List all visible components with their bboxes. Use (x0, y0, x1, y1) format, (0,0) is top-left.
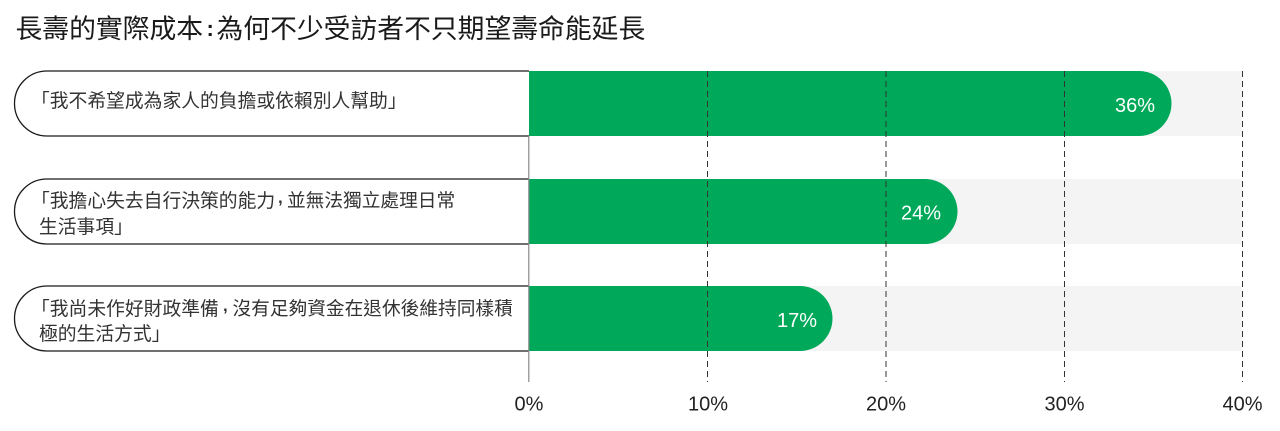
row 2 (15, 179, 1242, 244)
label pill 2: 「我擔心失去自行決策的能力 (31, 190, 275, 211)
label pill 1 (15, 71, 529, 136)
label pill 3: 極的生活方式」 (39, 323, 170, 344)
track 2 (529, 179, 1242, 244)
bar value labels: 17% (777, 310, 817, 332)
label pill 2: 生活事項」 (39, 216, 133, 237)
label pill 3 (15, 286, 529, 351)
row 3 (15, 286, 1242, 351)
title: 為何不少受訪者不只期望壽命能延長 (216, 14, 645, 44)
axis labels: 20% (866, 394, 906, 416)
label pill 2: 並無法獨立處理日常 (287, 190, 455, 211)
bar value labels: 24% (901, 202, 941, 224)
bar value labels (777, 95, 1155, 332)
track 1 (529, 71, 1242, 136)
label pill 3: 沒有足夠資金在退休後維持同樣積 (232, 298, 513, 319)
bar value labels: 36% (1115, 95, 1155, 117)
row 1 (15, 71, 1242, 136)
title: : (206, 16, 214, 41)
bar 2: 24% (529, 179, 958, 244)
label pill 2 (15, 179, 529, 244)
track 3 (529, 286, 1242, 351)
bar 3: 17% (529, 286, 832, 351)
axis labels: 10% (688, 394, 728, 416)
title (16, 14, 645, 44)
chart: reasons for not wanting longer life (15, 71, 1263, 416)
axis labels: 0% (515, 394, 544, 416)
label pill 3: 「我尚未作好財政準備 (31, 298, 219, 319)
axis labels: 30% (1044, 394, 1085, 416)
label pill 2: , (278, 188, 283, 207)
label pill 3: , (223, 296, 228, 315)
bar 1: 36% (529, 71, 1172, 136)
label pill 1: 「我不希望成為家人的負擔或依賴別人幫助」 (31, 90, 407, 111)
title: 長壽的實際成本 (16, 14, 203, 44)
axis labels (515, 394, 1263, 416)
axis line (528, 136, 530, 382)
dashed gridlines (708, 71, 1242, 382)
axis labels: 40% (1222, 394, 1263, 416)
